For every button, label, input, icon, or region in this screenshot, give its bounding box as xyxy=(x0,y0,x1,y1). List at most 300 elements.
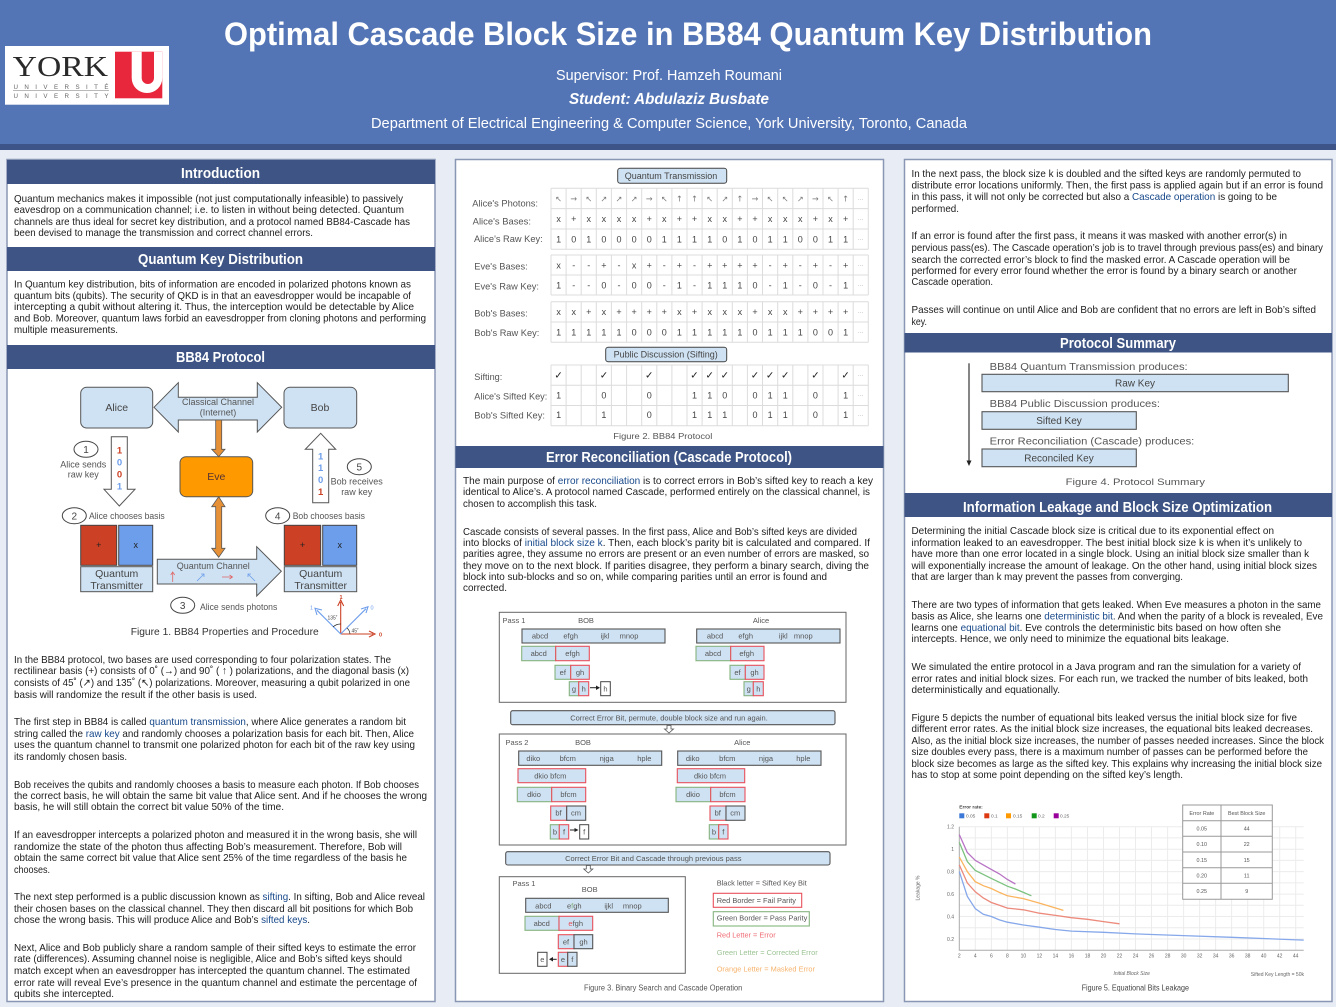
legend: Orange Letter = Masked Error xyxy=(717,965,815,974)
figure 2: BB84 protocol table xyxy=(472,168,868,441)
title: Optimal Cascade Block Size in BB84 Quantum Key Distribution xyxy=(224,16,1152,52)
department: Department of Electrical Engineering & Computer Science, York University, Toronto, Canada xyxy=(371,115,968,132)
text block: leakage discussion: will exponentially increase the amount of leakage. On the other hand, using initial block sizes xyxy=(911,560,1317,572)
heading: Introduction: Introduction xyxy=(181,165,260,182)
pass 2 box: diko xyxy=(686,754,700,763)
logo: York University: UNIVERSITY xyxy=(14,93,108,100)
logo: York University xyxy=(5,46,169,105)
Alice box xyxy=(81,387,153,428)
pass 1 box: gh xyxy=(750,668,759,677)
pass 2 box: bfcm xyxy=(719,754,735,763)
heading: BB84 Protocol: BB84 Protocol xyxy=(176,349,265,366)
table values: ... xyxy=(858,411,864,418)
y axis labels: 1 xyxy=(951,847,954,853)
text block: cascade explanation: parities agree, they assume no errors are present or an even number of errors are masked, so xyxy=(463,548,869,560)
text block: BB84 explanation: basis, he will still obtain the correct bit value 50% of the time. xyxy=(14,801,284,813)
text block: QKD: multiple measurements. xyxy=(14,324,118,336)
Bob quantum transmitter xyxy=(284,525,357,592)
text block: further passes: distribute error locations uniformly. Then, the first pass is applied again but if an error is found xyxy=(912,180,1323,192)
table: best block size: 44 xyxy=(1244,826,1250,832)
table: best block size: 0.10 xyxy=(1197,842,1207,848)
legend: Black letter = Sifted Key Bit xyxy=(717,879,808,888)
row labels: Sifting: xyxy=(474,372,502,382)
x axis labels: 8 xyxy=(1006,954,1009,960)
table values: ... xyxy=(858,195,864,202)
button: Quantum Transmission xyxy=(618,168,727,183)
pass 2 box: njga xyxy=(600,754,615,763)
step 1 label: raw key xyxy=(68,470,99,480)
y axis labels: 1.2 xyxy=(947,824,954,830)
header banner xyxy=(0,0,1336,150)
text block: BB84 explanation: obtain the same correct bit value that Alice sent 25% of the time regardless of the basis he xyxy=(14,852,407,864)
table values: 10100001111010110011 xyxy=(556,234,848,244)
heading: Protocol Summary xyxy=(904,333,1332,352)
step: sifted key: Sifted Key xyxy=(1036,416,1082,427)
supervisor: Supervisor: Prof. Hamzeh Roumani xyxy=(556,67,782,84)
text block: further passes: in this pass, it will not only be corrected but also a Cascade operation is going to be xyxy=(912,191,1277,203)
step 4 label xyxy=(266,508,365,524)
text block: BB84 explanation: the correct basis, he will obtain the same bit value that Alice sent. And if he chooses the wrong xyxy=(14,790,427,802)
text block: BB84 explanation: Bob receives the qubits and randomly chooses a basis to measure each photon. If Bob chooses xyxy=(14,779,419,791)
series: error rate 0.1 xyxy=(959,865,1120,924)
Alice quantum transmitter: Transmitter xyxy=(90,580,144,592)
row labels: Alice's Photons: xyxy=(472,198,538,208)
arrow: Eve to quantum channel xyxy=(212,497,225,557)
series: error rate 0.15 xyxy=(959,857,1063,910)
heading: Introduction xyxy=(7,160,435,184)
pass 1 box: BOB xyxy=(578,616,594,625)
step 2 label: Alice chooses basis xyxy=(89,511,165,521)
text block: BB84 explanation: rectilinear basis (+) consists of 0˚ (→) and 90˚ ( ↑ ) polarizations, and the diagonal basis (x) xyxy=(14,665,409,677)
step 1 label: 1 xyxy=(83,445,89,456)
text block: QKD: quantum bits (qubits). The security of QKD is in that an eavesdropper would be incapable of xyxy=(14,290,411,302)
table values: ... xyxy=(858,281,864,288)
pass 1 box: abcd xyxy=(531,649,547,658)
figure 1: BB84 procedure diagram xyxy=(60,383,383,638)
row labels: Bob's Raw Key: xyxy=(474,328,539,338)
step 4 label: 4 xyxy=(275,512,281,522)
pass 1 box: efgh xyxy=(565,649,580,658)
text block: cascade explanation: they move on to the next block. If parities disagree, they perform a binary search, diving the xyxy=(463,560,869,572)
pass 2 box: f xyxy=(722,828,725,836)
Eve box: Eve xyxy=(207,471,226,483)
step: raw key xyxy=(982,362,1288,392)
pass 2 box: bf xyxy=(555,809,563,818)
x axis labels: 26 xyxy=(1149,954,1154,960)
Bob box xyxy=(284,387,357,428)
x axis labels: 10 xyxy=(1021,954,1026,960)
legend: Red Letter = Error xyxy=(717,931,776,940)
polarization diagram: 45˚ xyxy=(352,628,359,634)
table: best block size: 11 xyxy=(1244,874,1250,880)
text block: leakage discussion: size doubles every pass, there is a maximum number of passes can be performed before the xyxy=(912,746,1308,758)
x axis labels: 24 xyxy=(1133,954,1138,960)
text block: introduction: eavesdrop on a communication channel; i.e. to listen in without being detected. Quantum xyxy=(14,204,404,216)
heading: Protocol Summary: Protocol Summary xyxy=(1060,335,1177,352)
step: raw key: BB84 Quantum Transmission produces: xyxy=(990,362,1188,373)
step: raw key: Raw Key xyxy=(1115,378,1155,390)
x axis labels: 12 xyxy=(1037,954,1042,960)
banner: correct error bit: Correct Error Bit, permute, double block size and run again. xyxy=(570,714,768,722)
heading: Information Leakage: Information Leakage and Block Size Optimization xyxy=(963,499,1272,516)
cascade pass 1 box xyxy=(499,877,685,973)
banner: cascade through previous pass: Correct Error Bit and Cascade through previous pass xyxy=(565,854,742,863)
step 1 label: Alice sends xyxy=(60,460,107,470)
banner: cascade through previous pass xyxy=(506,852,830,865)
series: error rate 0.05 xyxy=(959,872,1304,940)
text block: further passes: In the next pass, the block size k is doubled and the sifted keys are randomly permuted to xyxy=(912,168,1301,180)
table: best block size: Best Block Size xyxy=(1228,811,1265,817)
text block: leakage discussion: intercepts. Hence, we only need to minimize the equational bits leakage. xyxy=(912,633,1229,645)
table values: ... xyxy=(858,308,864,315)
chart axes xyxy=(959,827,1304,950)
pass 1 box: gh xyxy=(576,668,584,677)
pass 1 box: Alice xyxy=(753,616,769,625)
hollow arrow xyxy=(584,866,593,873)
pass 2 box: dkio bfcm xyxy=(534,772,566,780)
pass 2 box: bfcm xyxy=(719,790,736,799)
panel: left column xyxy=(7,160,435,1002)
table values: x--+-x+-+-++++-+-+-+ xyxy=(556,260,848,270)
Alice quantum transmitter: Quantum xyxy=(95,568,139,580)
table: best block size: 0.25 xyxy=(1197,889,1207,895)
text block: further passes: key. xyxy=(912,316,927,328)
table values: x+xxxx+x++xx++xxx+x+ xyxy=(556,214,848,224)
x axis labels: 4 xyxy=(974,954,977,960)
text block: introduction: been devised to manage the transmission and correct channel errors. xyxy=(14,227,313,239)
pass 2 box: b xyxy=(553,828,557,836)
classical channel arrow: (Internet) xyxy=(200,408,236,418)
y axis labels: 0.4 xyxy=(947,914,954,920)
table values: ✓✓✓✓✓✓✓✓✓✓✓ xyxy=(554,371,850,382)
series: error rate 0.25 xyxy=(959,835,1015,884)
text block: leakage discussion: different error rates. As the initial block size increases, the equational bits leaked decreases. xyxy=(912,723,1313,735)
table: best block size: 0.15 xyxy=(1197,858,1207,864)
step 5 label: raw key xyxy=(341,487,373,497)
table values: ... xyxy=(858,235,864,242)
table values: 10011001101 xyxy=(556,390,848,400)
pass 2 box: hple xyxy=(796,754,810,763)
text block: BB84 explanation: uses the quantum channel to transmit one polarized photon for each bit of the raw key using xyxy=(14,739,415,751)
text block: cascade explanation: identical to Alice’s. A protocol named Cascade, performed entirely on the classical channel, is xyxy=(463,486,870,498)
arrow: Bob receives raw key: 0 xyxy=(318,475,323,486)
chart grid xyxy=(959,827,1304,950)
heading: Quantum Key Distribution: Quantum Key Distribution xyxy=(138,251,303,268)
chart legend: Error rate: xyxy=(959,804,983,810)
text block: BB84 explanation: If an eavesdropper intercepts a polarized photon and measured it in the wrong basis, she will xyxy=(14,829,417,841)
row labels: Eve's Bases: xyxy=(474,261,528,271)
vertical arrow xyxy=(966,363,972,466)
cascade pass 1 box: abcd xyxy=(534,919,550,928)
text block: BB84 explanation: The next step performed is a public discussion known as sifting. In sifting, Bob and Alice reveal xyxy=(14,891,425,903)
text block: further passes: search the corrected error’s block to find the masked error. A Cascade operation will be xyxy=(912,254,1290,266)
pass 1 box: h xyxy=(582,684,586,694)
x axis labels: 36 xyxy=(1229,954,1235,960)
row labels: Bob's Bases: xyxy=(474,309,528,319)
table values: ... xyxy=(858,328,864,335)
text block: BB84 explanation: consists of 45˚ (↗) and 135˚ (↖) polarizations. Moreover, measuring a qubit polarized in one xyxy=(14,677,410,689)
table values: 1--0-00-1-1110-1-0-1 xyxy=(556,280,848,290)
button: Quantum Transmission: Quantum Transmission xyxy=(625,171,717,181)
text block: QKD: In Quantum key distribution, bits of information are encoded in polarized photons known as xyxy=(14,278,411,290)
cascade pass 1 box: mnop xyxy=(623,901,642,910)
text block: cascade explanation: corrected. xyxy=(463,582,507,594)
pass 2 box: Alice xyxy=(734,738,750,747)
quantum channel arrow xyxy=(157,547,281,596)
quantum channel arrow: Quantum Channel xyxy=(177,561,250,571)
legend: Green Border = Pass Parity xyxy=(717,914,808,922)
step: reconciled key xyxy=(982,436,1194,467)
pass 1 box: efgh xyxy=(739,649,754,658)
text block: BB84 explanation: qubits she intercepted. xyxy=(14,988,114,1000)
table values: 11011101101 xyxy=(556,410,848,420)
text block: further passes: Cascade operation. xyxy=(912,276,993,288)
step 3 label: Alice sends photons xyxy=(200,602,278,612)
Alice quantum transmitter: + xyxy=(96,540,101,550)
step 5 label: Bob receives xyxy=(331,476,383,486)
pass 1 box: ef xyxy=(560,668,567,677)
step: sifted key: BB84 Public Discussion produces: xyxy=(990,399,1160,410)
x axis labels: 28 xyxy=(1165,954,1171,960)
step: reconciled key: Error Reconciliation (Cascade) produces: xyxy=(990,436,1194,448)
x axis labels: 40 xyxy=(1261,954,1267,960)
x axis labels: 34 xyxy=(1213,954,1219,960)
x axis labels: 42 xyxy=(1277,954,1283,960)
pass 2 box: njga xyxy=(759,754,774,763)
cascade pass 1 box: abcd xyxy=(535,901,551,910)
cascade pass 1 box: ijkl xyxy=(604,901,613,910)
pass 1 box: g xyxy=(572,684,576,694)
text block: cascade explanation: block into sub-blocks and so on, while comparing parities until an error is found and xyxy=(463,571,827,583)
text block: BB84 explanation: error rate will reveal Eve’s presence in the quantum channel and estimate the percentage of xyxy=(14,977,417,989)
polarization diagram: 0 xyxy=(370,606,374,612)
chart legend: 0.2 xyxy=(1038,814,1045,820)
step 4 label: Bob chooses basis xyxy=(293,511,365,521)
table values: xx+x++++x+xxx+xx++++ xyxy=(556,307,848,317)
row labels: Alice's Bases: xyxy=(473,216,531,226)
arrow: Alice sends raw key: 0 xyxy=(117,470,122,480)
Bob quantum transmitter: + xyxy=(300,540,305,550)
pass 1 box: mnop xyxy=(794,632,813,641)
heading: Information Leakage xyxy=(904,493,1332,517)
arrow: channel to Eve xyxy=(212,420,225,457)
pass 2 box: BOB xyxy=(575,738,591,747)
pass 2 box: bfcm xyxy=(560,790,577,799)
pass 2 box: dkio xyxy=(686,790,700,799)
text block: BB84 explanation: string called the raw key and randomly chooses a polarization basis for each bit. Then, Alice xyxy=(14,728,414,740)
table values xyxy=(554,194,864,420)
x axis title: Initial Block Size xyxy=(1113,971,1150,977)
text block: BB84 explanation: its randomly chosen basis. xyxy=(14,751,127,763)
chart legend: 0.1 xyxy=(991,814,998,820)
legend xyxy=(713,879,818,974)
row labels: Eve's Raw Key: xyxy=(474,281,539,291)
polarization diagram: 0 xyxy=(379,632,382,638)
text block: leakage discussion: learns one equational bit. Eve controls the deterministic bits based on how often she xyxy=(912,622,1281,634)
pass 1 box: efgh xyxy=(563,632,578,641)
x axis labels: 22 xyxy=(1117,954,1122,960)
arrow: Bob receives raw key: 1 xyxy=(318,463,324,474)
text block: BB84 explanation: their chosen bases on the classical channel. They then discard all bit positions for which Bob xyxy=(14,903,413,915)
text block: BB84 explanation: rate (differences). Assuming channel noise is negligible, Alice and Bob’s sifted keys should xyxy=(14,953,402,965)
x axis labels: 16 xyxy=(1069,954,1074,960)
heading: Error Reconciliation: Error Reconciliation (Cascade Protocol) xyxy=(546,449,792,466)
table values: ↖→↖↗↗↗→↖↑↑↖↗↑→↖↖↗→↖↑ xyxy=(555,194,849,204)
figure 3: binary search and cascade operation xyxy=(499,612,846,992)
text block: cascade explanation xyxy=(463,475,874,594)
Bob quantum transmitter: Quantum xyxy=(299,568,343,580)
classical channel arrow: Classical Channel xyxy=(182,397,254,407)
x axis labels: 6 xyxy=(990,954,993,960)
button: Public Discussion xyxy=(606,347,727,362)
text block: introduction: Quantum mechanics makes it impossible (not just computationally infeasible) to passively xyxy=(14,193,404,205)
cascade pass 1 box: efgh xyxy=(568,919,583,928)
panel: middle column xyxy=(456,160,884,1002)
text block: leakage discussion: have more than one error located in a single block. Using an initial block size smaller than k xyxy=(912,548,1310,560)
student: Student: Abdulaziz Busbate xyxy=(569,91,769,108)
arrow: Alice sends raw key: 0 xyxy=(117,458,122,468)
text block: further passes xyxy=(912,168,1324,328)
pass 1 box: ijkl xyxy=(601,632,610,641)
pass 1 box: ijkl xyxy=(779,632,788,641)
pass 2 box: f xyxy=(583,828,586,836)
text block: introduction: channels are thus ideal for secret key distribution, and a protocol named BB84-Cascade has xyxy=(14,216,410,228)
x axis labels: 38 xyxy=(1245,954,1251,960)
y axis labels: 0.6 xyxy=(947,892,954,898)
table: best block size: 0.20 xyxy=(1197,874,1207,880)
polarization diagram: 135˚ xyxy=(328,614,338,622)
banner: correct error bit xyxy=(511,711,835,725)
arrow: Alice sends raw key: 1 xyxy=(117,446,123,456)
text block: leakage discussion: information leaked to an eavesdropper. The best initial block size k is when it’s unlikely to xyxy=(912,537,1302,549)
figure 4: protocol summary xyxy=(966,362,1288,488)
series: error rate 0.2 xyxy=(959,842,1031,896)
x axis labels: 44 xyxy=(1293,954,1299,960)
row labels: Alice's Raw Key: xyxy=(474,234,543,244)
x axis labels: 2 xyxy=(958,954,961,960)
Alice quantum transmitter: x xyxy=(133,540,138,550)
figure 4 caption: Figure 4. Protocol Summary xyxy=(1066,477,1205,488)
table values: 11111000111110111001 xyxy=(556,327,848,337)
Alice quantum transmitter xyxy=(81,525,153,592)
Bob quantum transmitter: Transmitter xyxy=(294,580,348,592)
y axis labels xyxy=(947,824,954,943)
pass 1 box: abcd xyxy=(707,632,723,641)
chart legend xyxy=(959,804,1070,820)
table: best block size: 0.05 xyxy=(1197,826,1207,832)
x axis labels: 18 xyxy=(1085,954,1090,960)
pass 1 box: h xyxy=(603,684,608,694)
text block: BB84 explanation: In the BB84 protocol, two bases are used corresponding to four polarization states. The xyxy=(14,654,391,666)
pass 2 box: bf xyxy=(715,809,722,818)
heading: Error Reconciliation xyxy=(456,446,884,468)
table: best block size: 22 xyxy=(1244,842,1250,848)
text block: further passes: If an error is found after the first pass, it means it was masked with another error(s) in xyxy=(912,230,1287,242)
pass 1 box: g xyxy=(747,684,751,694)
Eve box xyxy=(180,457,253,497)
polarization diagram: 1 xyxy=(340,595,343,601)
text block: BB84 explanation: randomize the state of the photon thus affecting Bob’s measurement. Therefore, Bob will xyxy=(14,841,402,853)
text block: leakage discussion: basis as Alice, she learns one deterministic bit. And when the parity of a block is revealed, Eve xyxy=(912,610,1323,622)
text block: leakage discussion: error rates and initial block sizes. For each run, we tracked the number of bits leaked, both xyxy=(912,673,1308,685)
pass 1 box: h xyxy=(756,684,760,694)
pass 2 box: hple xyxy=(637,754,651,763)
table: best block size xyxy=(1183,805,1272,899)
text block: leakage discussion: Determining the initial Cascade block size is critical due to its exponential effect on xyxy=(912,525,1274,537)
text block: further passes: performed. xyxy=(912,203,959,215)
text block: QKD: intercepting a qubit without altering it. Thus, the interception would be detectable by Alice xyxy=(14,301,414,313)
step: sifted key xyxy=(982,399,1160,429)
logo: York University: UNIVERSITÉ xyxy=(14,84,108,91)
x axis labels: 20 xyxy=(1101,954,1106,960)
heading: Quantum Key Distribution xyxy=(7,247,435,271)
table: best block size: 15 xyxy=(1244,858,1250,864)
legend: Red Border = Fail Parity xyxy=(717,896,796,905)
pass 2 box: f xyxy=(563,828,566,836)
text block: cascade explanation: The main purpose of error reconciliation is to correct errors in Bob’s sifted key to reach a key xyxy=(463,475,874,487)
text block: leakage discussion: We simulated the entire protocol in a Java program and ran the simulation for a variety of xyxy=(912,661,1301,673)
arrow: Bob receives raw key xyxy=(305,433,336,503)
step 5 label: 5 xyxy=(357,462,363,474)
cascade pass 1 box: e xyxy=(540,955,544,964)
arrow: Bob receives raw key: 1 xyxy=(318,452,324,462)
text block: further passes: performed for every error found whether the error is found by a binary search or another xyxy=(912,265,1297,277)
logo: York University: YORK xyxy=(13,51,108,83)
cascade pass 1 box: efgh xyxy=(567,901,582,910)
pass 1 box: efgh xyxy=(738,632,753,641)
table values: ... xyxy=(858,215,864,222)
step 2 label: 2 xyxy=(72,512,78,522)
text block: leakage discussion: deterministically and equationally. xyxy=(912,684,1060,696)
text block: leakage discussion: Figure 5 depicts the number of equational bits leaked versus the initial block size for five xyxy=(912,712,1297,724)
x axis labels: 30 xyxy=(1181,954,1187,960)
panel: right column xyxy=(904,160,1332,1002)
pass 2 box xyxy=(499,734,846,845)
text block: BB84 explanation: Next, Alice and Bob publicly share a random sample of their sifted keys to estimate the error xyxy=(14,942,416,954)
Alice box: Alice xyxy=(105,402,128,414)
cascade pass 1 box: Pass 1 xyxy=(513,879,535,888)
figure 5 caption: Figure 5. Equational Bits Leakage xyxy=(1082,982,1189,992)
pass 2 box: cm xyxy=(730,809,740,818)
text block: cascade explanation: Cascade consists of several passes. In the first pass, Alice and Bob’s sifted keys are divided xyxy=(463,526,857,538)
legend: Green Letter = Corrected Error xyxy=(717,948,818,957)
pass 1 box: Pass 1 xyxy=(503,616,525,625)
step 3 label xyxy=(171,597,278,613)
text block: cascade explanation: chosen to accomplish this task. xyxy=(463,498,597,510)
classical channel arrow xyxy=(154,383,282,432)
pass 2 box: cm xyxy=(571,809,581,818)
text block: BB84 explanation: match except when an eavesdropper has intercepted the quantum channel. The estimated xyxy=(14,965,410,977)
text block: BB84 explanation xyxy=(14,654,427,1000)
key length note: Sifted Key Length = 50k xyxy=(1251,972,1304,978)
polarization diagram xyxy=(310,595,382,638)
text block: introduction xyxy=(14,193,410,239)
pass 1 box: ef xyxy=(734,668,742,677)
step 2 label xyxy=(62,508,165,524)
table grid xyxy=(551,188,868,426)
hollow arrow xyxy=(664,726,674,733)
table values: ... xyxy=(858,261,864,268)
figure 1 caption: Figure 1. BB84 Properties and Procedure xyxy=(131,626,319,638)
pass 2 box: dkio bfcm xyxy=(694,772,726,780)
text block: leakage discussion: has to stop at some point depending on the sifted key’s length. xyxy=(912,769,1183,781)
chart legend: 0.05 xyxy=(966,814,976,820)
cascade pass 1 box: ef xyxy=(563,938,570,946)
pass 2 box: Pass 2 xyxy=(506,738,528,747)
text block: BB84 explanation: chose the wrong basis. This will produce Alice and Bob’s sifted keys. xyxy=(14,914,310,926)
text block: leakage discussion: that are larger than k may prevent the passes from converging. xyxy=(912,571,1183,583)
chart legend: 0.25 xyxy=(1060,814,1070,820)
